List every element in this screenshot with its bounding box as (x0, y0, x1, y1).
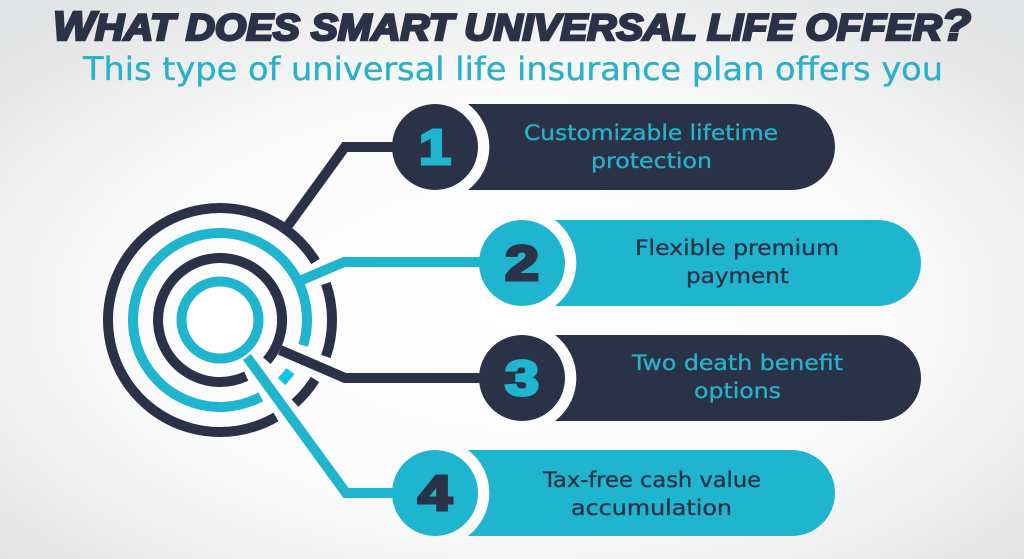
item 4 (392, 450, 835, 536)
connector line 4 (247, 357, 400, 493)
item 4: Tax-free cash value (542, 468, 761, 492)
item 2: 2 (505, 237, 539, 291)
connector line 3 (280, 350, 490, 378)
connector line 2 (302, 262, 490, 280)
item 3: Two death benefit (631, 351, 843, 375)
connector line 1 (287, 147, 400, 227)
concentric target icon (108, 208, 332, 432)
item 1 (392, 104, 835, 190)
item 2 (479, 220, 921, 306)
item 2: Flexible premium (635, 236, 839, 260)
item 3: options (694, 379, 781, 403)
item 3: 3 (505, 352, 539, 406)
item 3 (479, 335, 921, 421)
item 4: 4 (418, 467, 452, 521)
title: WHAT DOES SMART UNIVERSAL LIFE OFFER ? (53, 1, 971, 50)
item 1: Customizable lifetime (524, 121, 778, 145)
item 1: protection (591, 149, 712, 173)
subtitle: This type of universal life insurance plan offers you (82, 50, 943, 88)
item 2: payment (686, 264, 789, 288)
item 4: accumulation (571, 496, 732, 520)
item 1: 1 (419, 121, 451, 175)
